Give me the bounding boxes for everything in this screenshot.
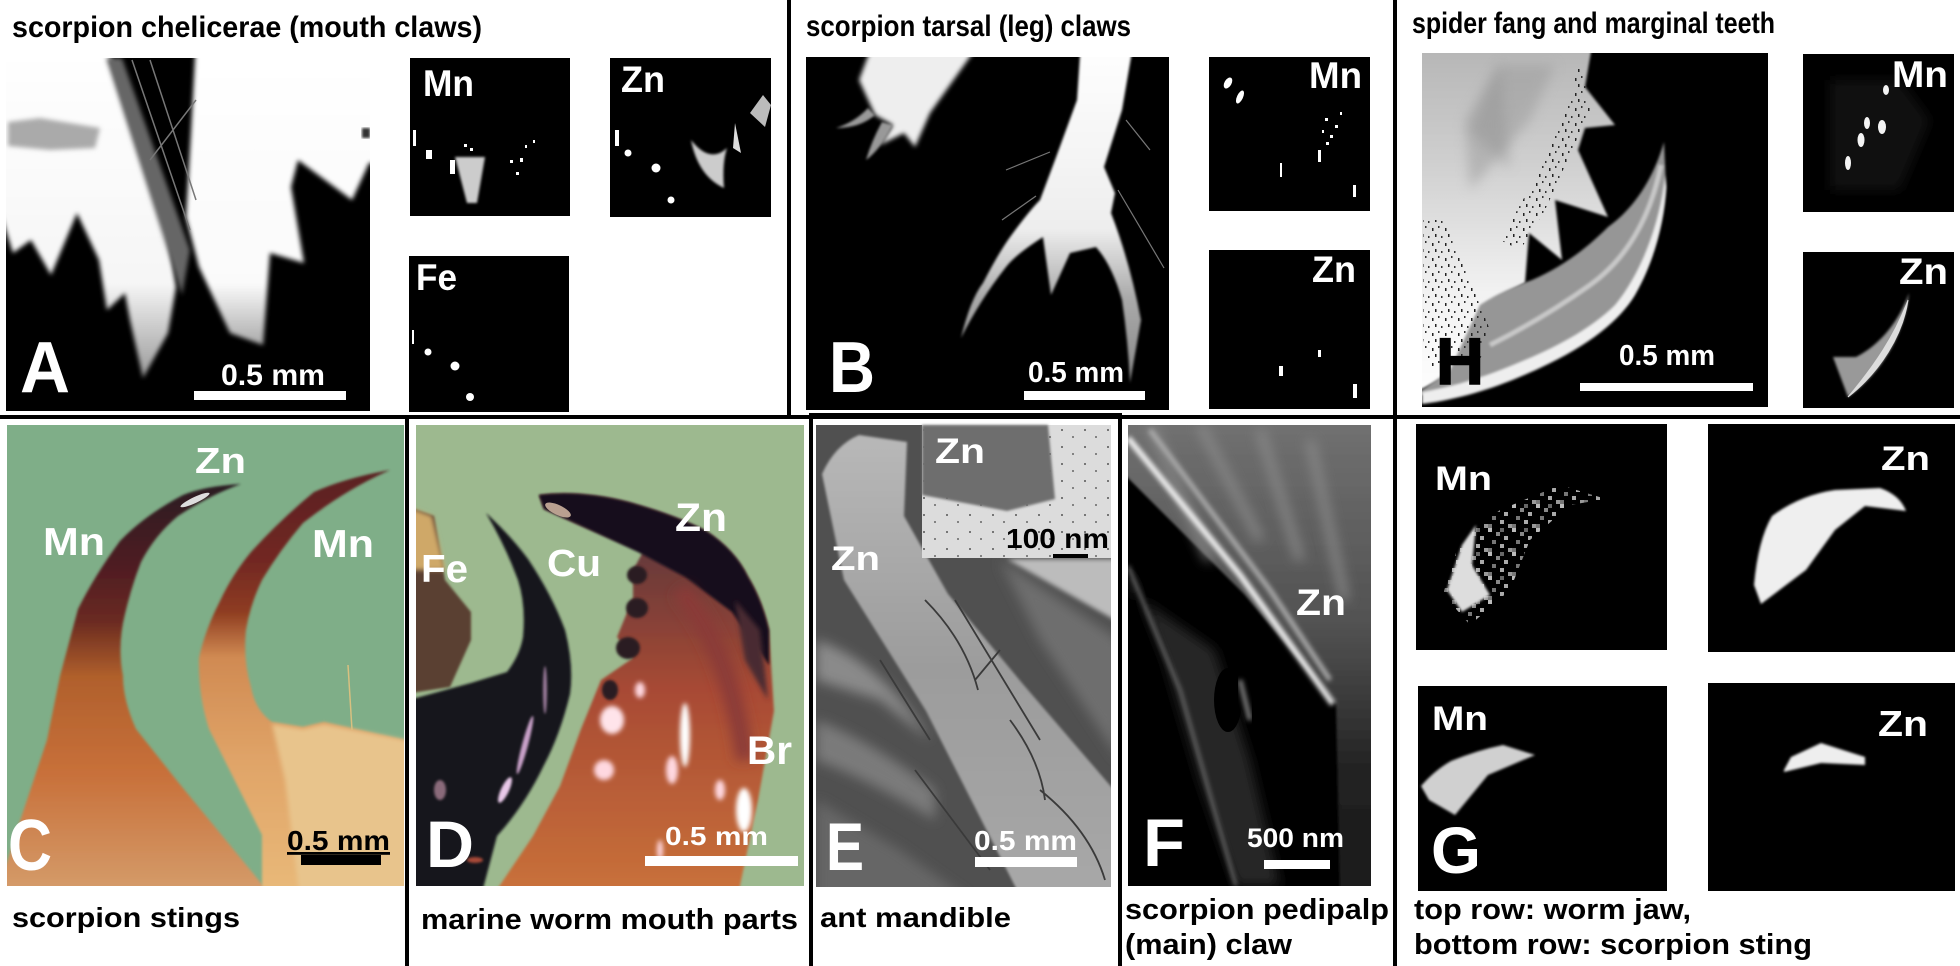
scale bar H: 0.5 mm — [1619, 340, 1715, 372]
element map: scorpion sting Mn: Mn — [1432, 700, 1488, 738]
micrograph A: claws on black — [6, 58, 370, 411]
scale bar A: 0.5 mm — [221, 359, 325, 392]
element label Fe: Fe — [421, 548, 468, 591]
scale bar D — [645, 821, 798, 866]
element map: Zn: Zn — [621, 59, 665, 100]
scale bar E: 0.5 mm — [974, 825, 1077, 856]
element map: worm jaw Mn — [1416, 424, 1667, 650]
panel: F scorpion pedipalp claw — [1110, 410, 1389, 961]
panel: H spider fang — [1400, 7, 1954, 408]
element map: Mn: Mn — [423, 63, 474, 104]
panel: E ant mandible — [816, 425, 1120, 933]
scale bar F — [1247, 823, 1344, 869]
heading: scorpion chelicerae: scorpion chelicerae (mouth claws) — [12, 11, 482, 44]
panel: C scorpion stings — [0, 425, 420, 933]
element label Zn: Zn — [1296, 582, 1346, 623]
caption: marine worm mouth parts: marine worm mouth parts — [421, 904, 798, 936]
panel: B scorpion tarsal claws — [806, 10, 1370, 410]
panel letter C: C — [8, 806, 52, 886]
scale bar C: 0.5 mm — [287, 825, 390, 856]
element map: Fe — [409, 256, 569, 412]
element map: scorpion sting Zn — [1708, 683, 1955, 891]
element label Mn right: Mn — [312, 523, 374, 566]
inset: TEM 100 nm: 100 nm — [1006, 523, 1109, 554]
scale bar D: 0.5 mm — [665, 821, 768, 851]
element map: Mn: Mn — [1892, 54, 1948, 95]
scale bar F: 500 nm — [1247, 823, 1344, 853]
caption: ant mandible: ant mandible — [820, 902, 1011, 933]
element label Zn: Zn — [675, 496, 727, 540]
scale bar E — [974, 825, 1077, 867]
element map: Mn — [1803, 54, 1954, 212]
panel letter D: D — [426, 807, 474, 881]
element map: worm jaw Zn — [1708, 424, 1955, 652]
inset: TEM 100 nm: Zn — [935, 432, 985, 471]
panel letter F: F — [1143, 805, 1185, 881]
panel: G elemental maps — [1414, 424, 1955, 961]
element map: Mn: Mn — [1309, 55, 1362, 96]
scale bar H — [1580, 340, 1753, 391]
photo C: two stings on green — [0, 425, 420, 900]
micrograph B: leg claw on black — [806, 40, 1169, 410]
element map: Fe: Fe — [416, 257, 457, 298]
panel letter E: E — [826, 809, 864, 885]
element map: worm jaw Mn: Mn — [1435, 460, 1492, 498]
panel: D marine worm mouth parts — [405, 425, 804, 936]
element map: Zn: Zn — [1899, 251, 1948, 292]
caption: rows explanation: bottom row: scorpion sting — [1414, 929, 1812, 961]
scale bar A — [194, 359, 346, 400]
heading: scorpion tarsal claws: scorpion tarsal (leg) claws — [806, 10, 1131, 43]
element label Zn: Zn — [831, 540, 880, 578]
scale bar B: 0.5 mm — [1028, 357, 1124, 389]
element map: Zn: Zn — [1312, 249, 1356, 290]
caption: scorpion pedipalp (main) claw: scorpion pedipalp — [1125, 894, 1389, 926]
caption: rows explanation: top row: worm jaw, — [1414, 894, 1691, 926]
element map: worm jaw Zn: Zn — [1881, 440, 1930, 478]
element map: Zn — [1209, 249, 1370, 409]
element map: Mn — [1209, 55, 1370, 211]
scale bar B — [1024, 357, 1145, 400]
caption: scorpion pedipalp (main) claw: (main) claw — [1125, 929, 1292, 961]
inset: TEM 100 nm — [922, 425, 1111, 558]
element label Br: Br — [747, 729, 792, 773]
panel letter G: G — [1431, 813, 1481, 887]
micrograph E: mandible SEM — [816, 425, 1120, 900]
caption: scorpion pedipalp (main) claw — [1125, 894, 1389, 961]
heading: spider fang and marginal teeth: spider fang and marginal teeth — [1412, 7, 1775, 40]
caption: scorpion stings: scorpion stings — [12, 902, 240, 933]
element map: Mn — [410, 58, 570, 216]
micrograph H: fang and teeth — [1400, 40, 1768, 407]
element label Cu: Cu — [547, 543, 601, 585]
panel letter H: H — [1436, 324, 1484, 398]
element map: Zn — [610, 58, 771, 217]
panel letter B: B — [829, 328, 875, 408]
panel: A scorpion chelicerae — [0, 11, 771, 412]
photo D: worm jaws on green — [405, 425, 804, 900]
element label Mn left: Mn — [43, 521, 105, 564]
element map: Zn — [1803, 251, 1954, 408]
caption: rows explanation — [1414, 894, 1812, 961]
panel letter A: A — [20, 328, 70, 408]
element label Zn: Zn — [195, 440, 246, 481]
micrograph F: claw edge SEM — [1128, 425, 1371, 886]
element map: scorpion sting Mn — [1418, 686, 1667, 891]
element map: scorpion sting Zn: Zn — [1878, 703, 1928, 744]
